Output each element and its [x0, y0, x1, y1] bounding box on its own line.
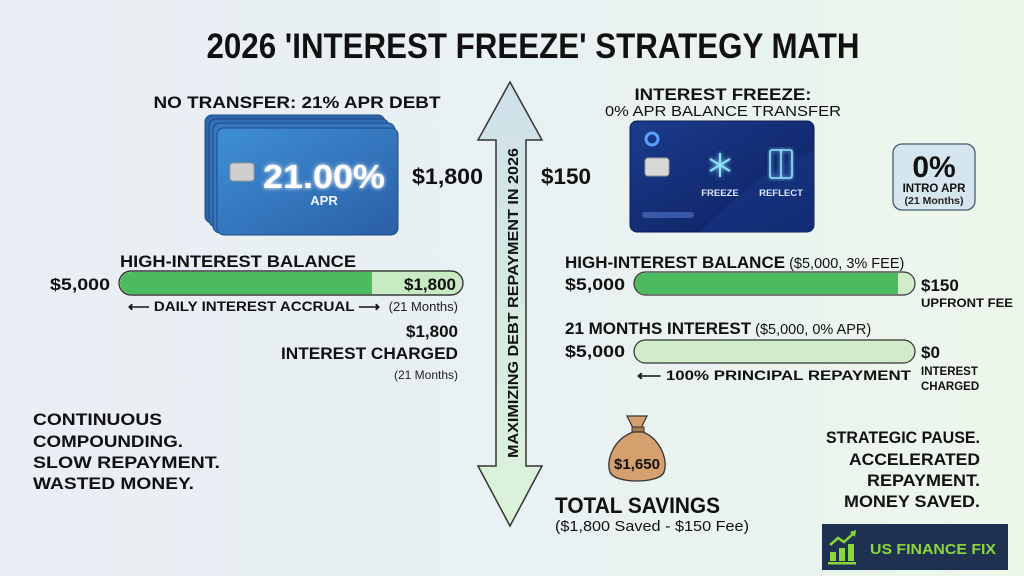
text: right summary [826, 428, 980, 511]
arrow: vertical double-headed [478, 82, 542, 526]
icon: card stack 21% APR: 21.00% [263, 158, 385, 195]
heading: interest freeze: INTEREST FREEZE: [634, 85, 812, 104]
label: high-interest balance: HIGH-INTEREST BALANCE [120, 252, 356, 271]
label: high-interest balance fee: HIGH-INTEREST BALANCE ($5,000, 3% FEE) [565, 253, 904, 272]
bar: high-interest balance: $1,800 [404, 275, 456, 294]
annotation: daily interest accrual: ⟵ DAILY INTEREST ACCRUAL ⟶ [128, 299, 381, 314]
icon: card stack 21% APR: APR [310, 193, 338, 208]
icon: balance transfer card: REFLECT [759, 188, 803, 199]
icon: balance transfer card [630, 121, 814, 232]
logo: US Finance Fix: US FINANCE FIX [870, 541, 996, 558]
text: right summary: ACCELERATED [849, 450, 980, 469]
bar: zero interest: CHARGED [921, 381, 979, 393]
bar: zero interest: $0 [921, 343, 940, 362]
text: left summary: COMPOUNDING. [33, 432, 183, 451]
text: interest charged: (21 Months) [394, 368, 458, 382]
bar: zero interest: INTEREST [921, 366, 978, 378]
panel: interest freeze: 0% APR BALANCE TRANSFER [605, 103, 841, 120]
badge: 0% intro apr [893, 144, 975, 210]
icon: card stack 21% APR [205, 115, 398, 235]
bar: transfer balance [565, 272, 1013, 310]
bar: high-interest balance: $5,000 [50, 275, 110, 294]
panel: interest freeze: ($1,800 Saved - $150 Fee) [555, 519, 749, 535]
icon: money bag savings [609, 416, 665, 481]
title: 2026 'INTEREST FREEZE' STRATEGY MATH [206, 27, 860, 66]
panel: interest freeze [541, 85, 1013, 535]
bar: high-interest balance [50, 271, 463, 295]
value: $150: $150 [541, 164, 591, 189]
text: left summary: WASTED MONEY. [33, 474, 194, 493]
badge: 0% intro apr: (21 Months) [905, 195, 963, 207]
icon: balance transfer card: FREEZE [701, 188, 739, 199]
text: right summary: MONEY SAVED. [844, 492, 980, 511]
bar: zero interest: $5,000 [565, 342, 625, 361]
label: 21 months interest: 21 MONTHS INTEREST ($5,000, 0% APR) [565, 319, 871, 338]
bar: zero interest [565, 340, 979, 393]
bar: transfer balance: UPFRONT FEE [921, 298, 1013, 310]
text: interest charged: $1,800 [406, 322, 458, 341]
text: left summary [33, 410, 220, 493]
panel: no transfer: (21 Months) [389, 299, 458, 314]
panel: no transfer [33, 93, 483, 493]
heading: total savings: TOTAL SAVINGS [555, 493, 720, 518]
badge: 0% intro apr: INTRO APR [903, 183, 966, 195]
arrow: vertical double-headed: MAXIMIZING DEBT REPAYMENT IN 2026 [505, 148, 522, 458]
text: right summary: STRATEGIC PAUSE. [826, 428, 980, 447]
logo: US Finance Fix [822, 524, 1008, 570]
text: interest charged [281, 322, 458, 382]
icon: money bag savings: $1,650 [614, 456, 660, 473]
bar: transfer balance: $5,000 [565, 275, 625, 294]
text: interest charged: INTEREST CHARGED [281, 344, 458, 363]
text: left summary: CONTINUOUS [33, 410, 162, 429]
bar: transfer balance: $150 [921, 276, 959, 295]
text: right summary: REPAYMENT. [867, 471, 980, 490]
annotation: principal repayment: ⟵ 100% PRINCIPAL REPAYMENT [637, 368, 912, 383]
badge: 0% intro apr: 0% [912, 151, 956, 184]
text: left summary: SLOW REPAYMENT. [33, 453, 220, 472]
value: $1,800: $1,800 [412, 164, 483, 189]
heading: no transfer: NO TRANSFER: 21% APR DEBT [154, 93, 441, 112]
